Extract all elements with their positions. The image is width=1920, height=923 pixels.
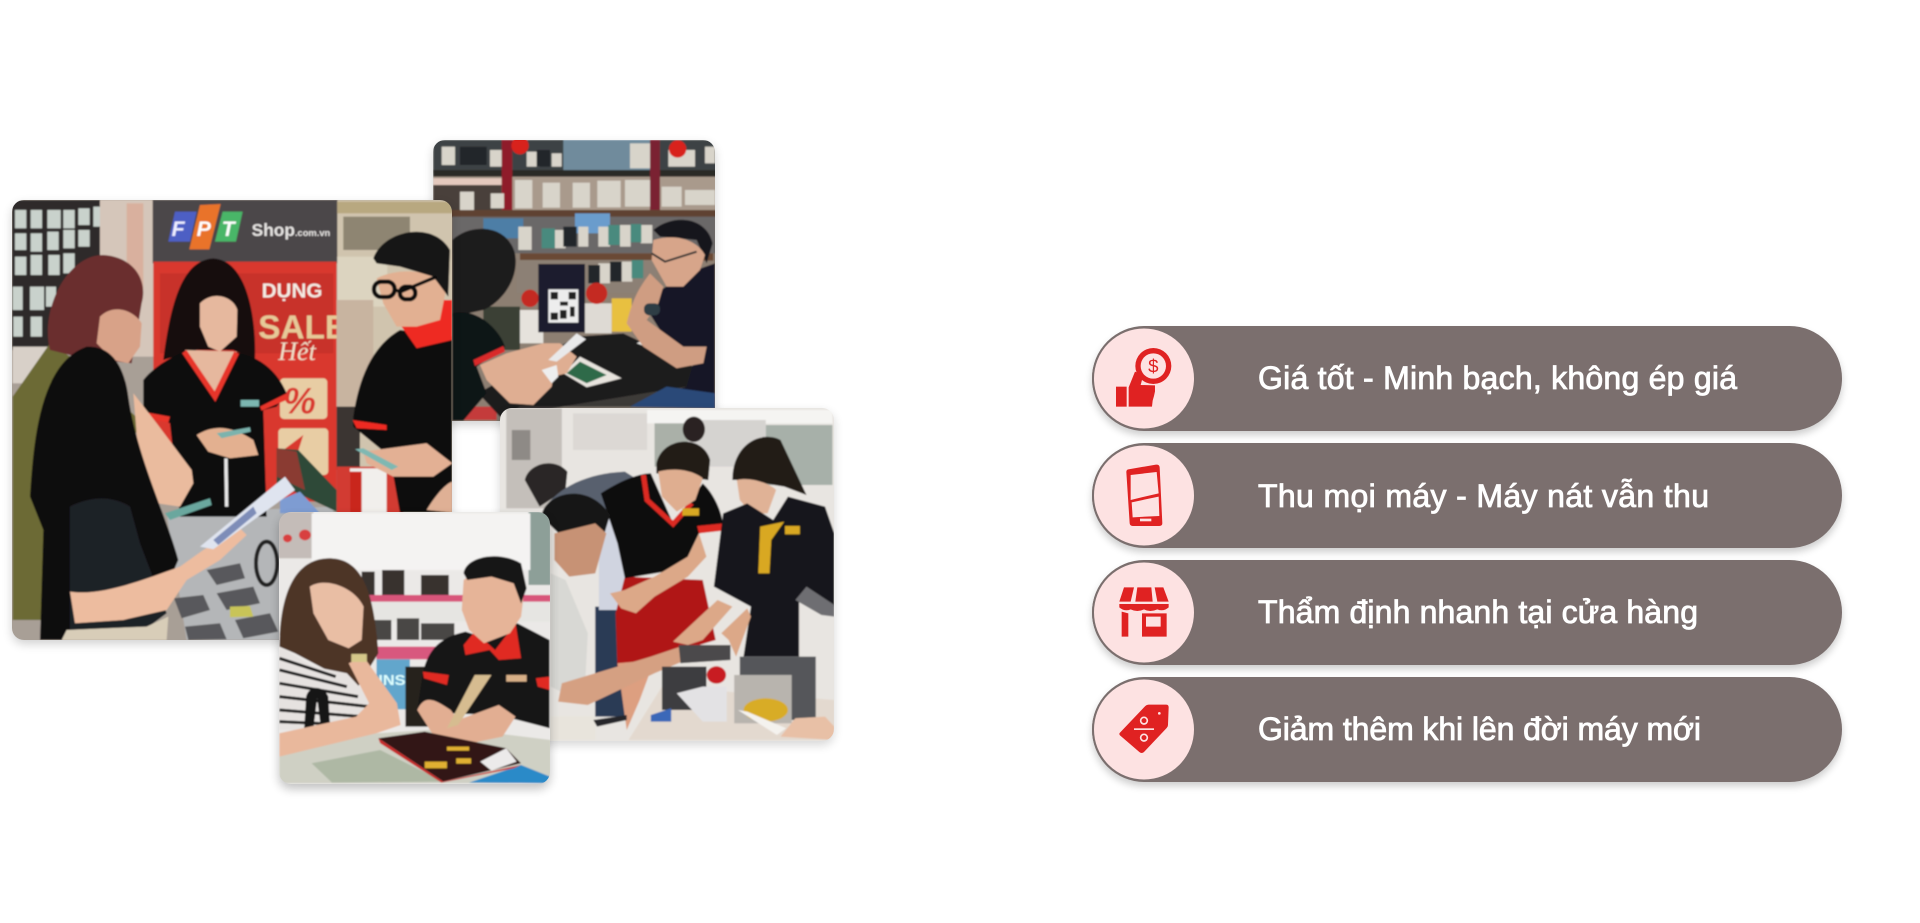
icon: discount tag <box>1119 705 1169 753</box>
banner <box>153 200 347 502</box>
man <box>627 220 715 408</box>
item 3: quick in-store appraisal <box>1092 560 1842 669</box>
banner: % <box>283 380 316 421</box>
brochure <box>378 732 521 783</box>
banner: Shop.com.vn <box>252 220 331 240</box>
back customer <box>525 463 643 717</box>
QR stand <box>483 264 612 350</box>
banner: SALE <box>258 309 347 346</box>
woman <box>452 229 586 421</box>
banner: DỤNG <box>262 279 322 302</box>
right man <box>353 232 452 513</box>
photo: FPT Shop staff with customers <box>10 198 453 644</box>
red skirt woman <box>601 417 723 730</box>
banner: T <box>222 217 237 241</box>
icon: storefront <box>1119 587 1169 637</box>
item 1: good price <box>1092 326 1842 435</box>
item 2: all devices accepted <box>1092 443 1842 552</box>
label: Giảm thêm khi lên đời máy mới <box>1258 711 1701 747</box>
banner: P <box>197 217 212 241</box>
right background <box>337 200 453 513</box>
front customer <box>541 494 686 740</box>
woman <box>279 558 401 757</box>
icon: thumbs up with dollar coin: $ <box>1148 356 1159 377</box>
photo: staff assisting customers at counter <box>497 407 838 745</box>
table <box>478 333 693 417</box>
list: benefits <box>1092 326 1842 786</box>
front woman <box>30 347 295 640</box>
man <box>417 556 550 747</box>
item 4: extra discount on upgrade <box>1092 677 1842 786</box>
counter <box>629 645 834 740</box>
label: Giá tốt - Minh bạch, không ép giá <box>1258 360 1737 396</box>
left woman with jacket <box>13 255 143 620</box>
icon: cracked phone <box>1126 465 1162 526</box>
photo: QR payment at store shelves <box>433 137 730 425</box>
table <box>167 507 333 640</box>
photo: woman and consultant at table <box>276 510 553 789</box>
banner: Hết <box>277 337 317 366</box>
photo: woman and consultant at table: INSID <box>378 673 422 689</box>
white box <box>350 468 387 513</box>
table <box>279 728 551 783</box>
icon: thumbs up with dollar coin <box>1116 348 1171 407</box>
centre woman <box>143 258 288 517</box>
label: Thu mọi máy - Máy nát vẫn thu <box>1258 478 1709 514</box>
display <box>277 448 337 513</box>
label: Thẩm định nhanh tại cửa hàng <box>1258 594 1698 630</box>
right woman <box>673 437 834 657</box>
banner: F <box>172 217 186 241</box>
